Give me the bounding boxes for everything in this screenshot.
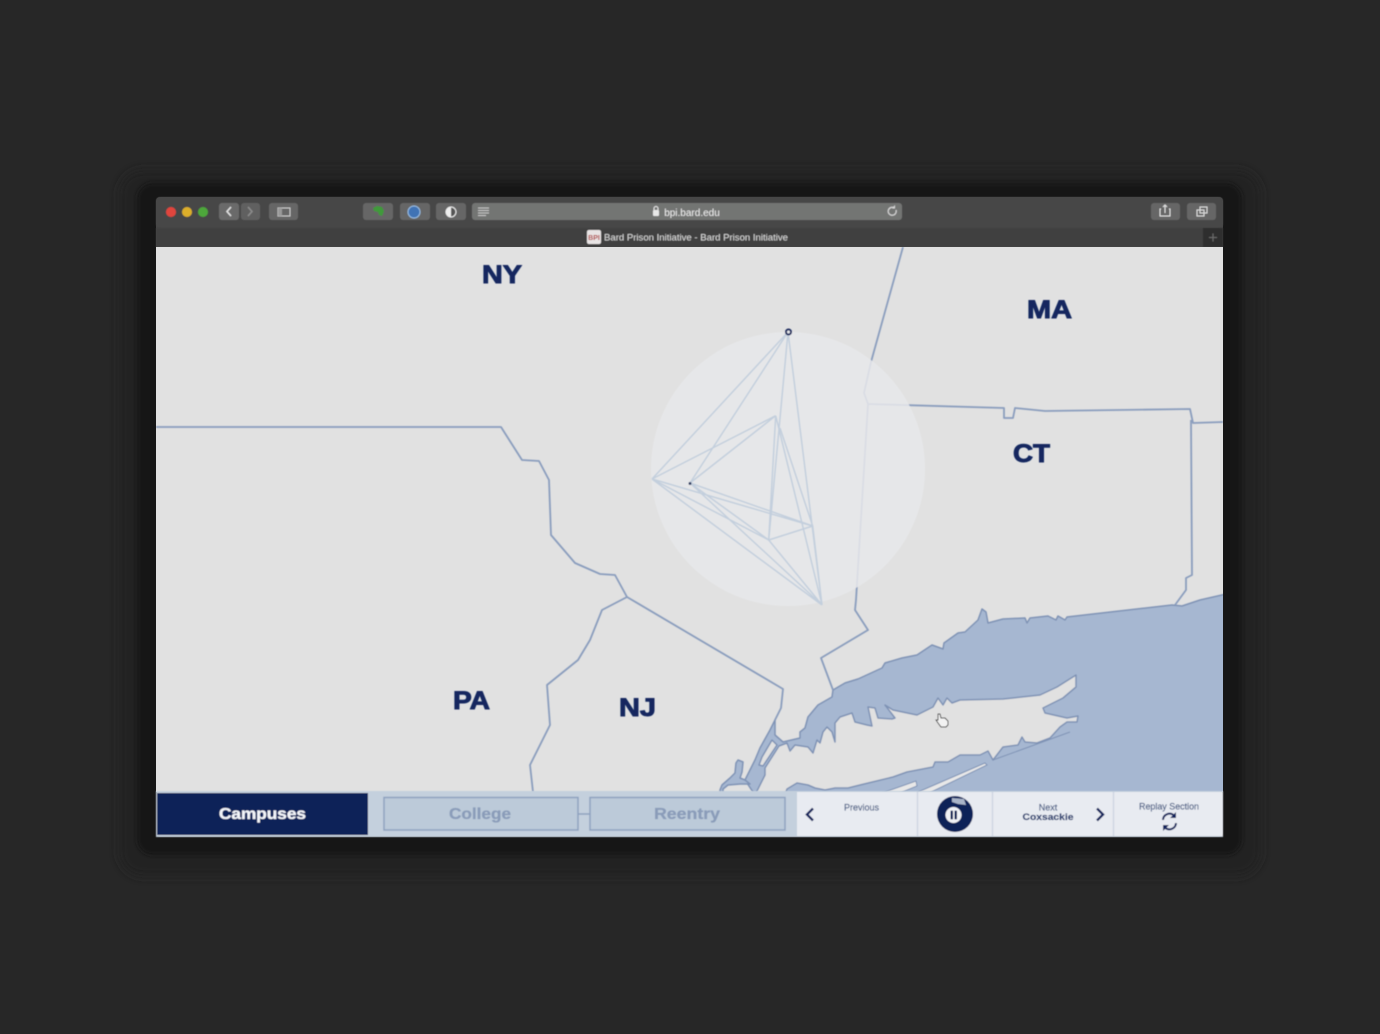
previous button: Previous (844, 802, 879, 812)
previous button (807, 802, 879, 820)
campus marker: left (688, 482, 692, 485)
icon: hand cursor (936, 714, 948, 727)
border: NJ-NY (627, 597, 783, 720)
window control buttons (166, 207, 208, 217)
playback controls panel (797, 792, 1223, 836)
highlight circle (651, 332, 925, 606)
address bar: bpi.bard.edu (664, 208, 720, 219)
share button (1151, 203, 1180, 220)
tab: College: College (449, 806, 511, 823)
replay button: Replay Section (1139, 802, 1199, 812)
border: NY-MA-CT (821, 247, 903, 690)
state label: NY: NY (482, 261, 522, 289)
tab title: Bard Prison Initiative - Bard Prison Initiative (604, 232, 788, 242)
tab: Campuses (157, 793, 368, 835)
border: NJ-PA (530, 597, 627, 792)
screenshot scene (134, 180, 1245, 858)
sidebar button (269, 203, 298, 220)
tab: Campuses: Campuses (219, 806, 306, 823)
state label: MA: MA (1027, 296, 1072, 324)
map panel (156, 247, 1226, 795)
border: CT-RI (1175, 420, 1192, 605)
favicon (587, 230, 601, 244)
state label: NJ: NJ (619, 694, 656, 722)
tab: Reentry (590, 798, 785, 830)
state label: PA: PA (453, 687, 490, 715)
campus network lines (652, 332, 822, 605)
border: NY-PA (156, 427, 627, 597)
new tab button (1203, 228, 1223, 247)
tabs button (1187, 203, 1216, 220)
address bar (472, 203, 902, 220)
browser window (156, 197, 1223, 837)
barrier islands (882, 732, 1070, 795)
staten island channel (720, 760, 750, 795)
tab bar (156, 228, 1223, 247)
connector (578, 813, 590, 815)
next button: Next (1039, 802, 1058, 812)
extension icon: green (363, 203, 393, 220)
favicon: BPI (588, 235, 600, 242)
map contents (156, 247, 1226, 795)
next button: Coxsackie (1022, 812, 1074, 823)
manhattan (759, 740, 777, 766)
browser toolbar (156, 197, 1223, 228)
long island (755, 675, 1078, 795)
window shadow (119, 170, 1261, 876)
tab: Reentry: Reentry (654, 806, 720, 823)
state borders (156, 247, 1223, 792)
extension icon: shield (436, 203, 466, 220)
state label: CT: CT (1013, 440, 1050, 468)
pause button (937, 796, 973, 832)
border: CT-MA (868, 404, 1223, 423)
tab: College (384, 798, 578, 830)
extension icon: blue (400, 203, 430, 220)
campus marker: top (786, 330, 791, 334)
bottom navigation bar (156, 791, 1223, 837)
land background (156, 247, 1223, 792)
replay button (1139, 802, 1199, 831)
back and forward buttons (219, 203, 260, 220)
next button (1022, 802, 1103, 823)
water: sound and ocean (745, 594, 1226, 795)
